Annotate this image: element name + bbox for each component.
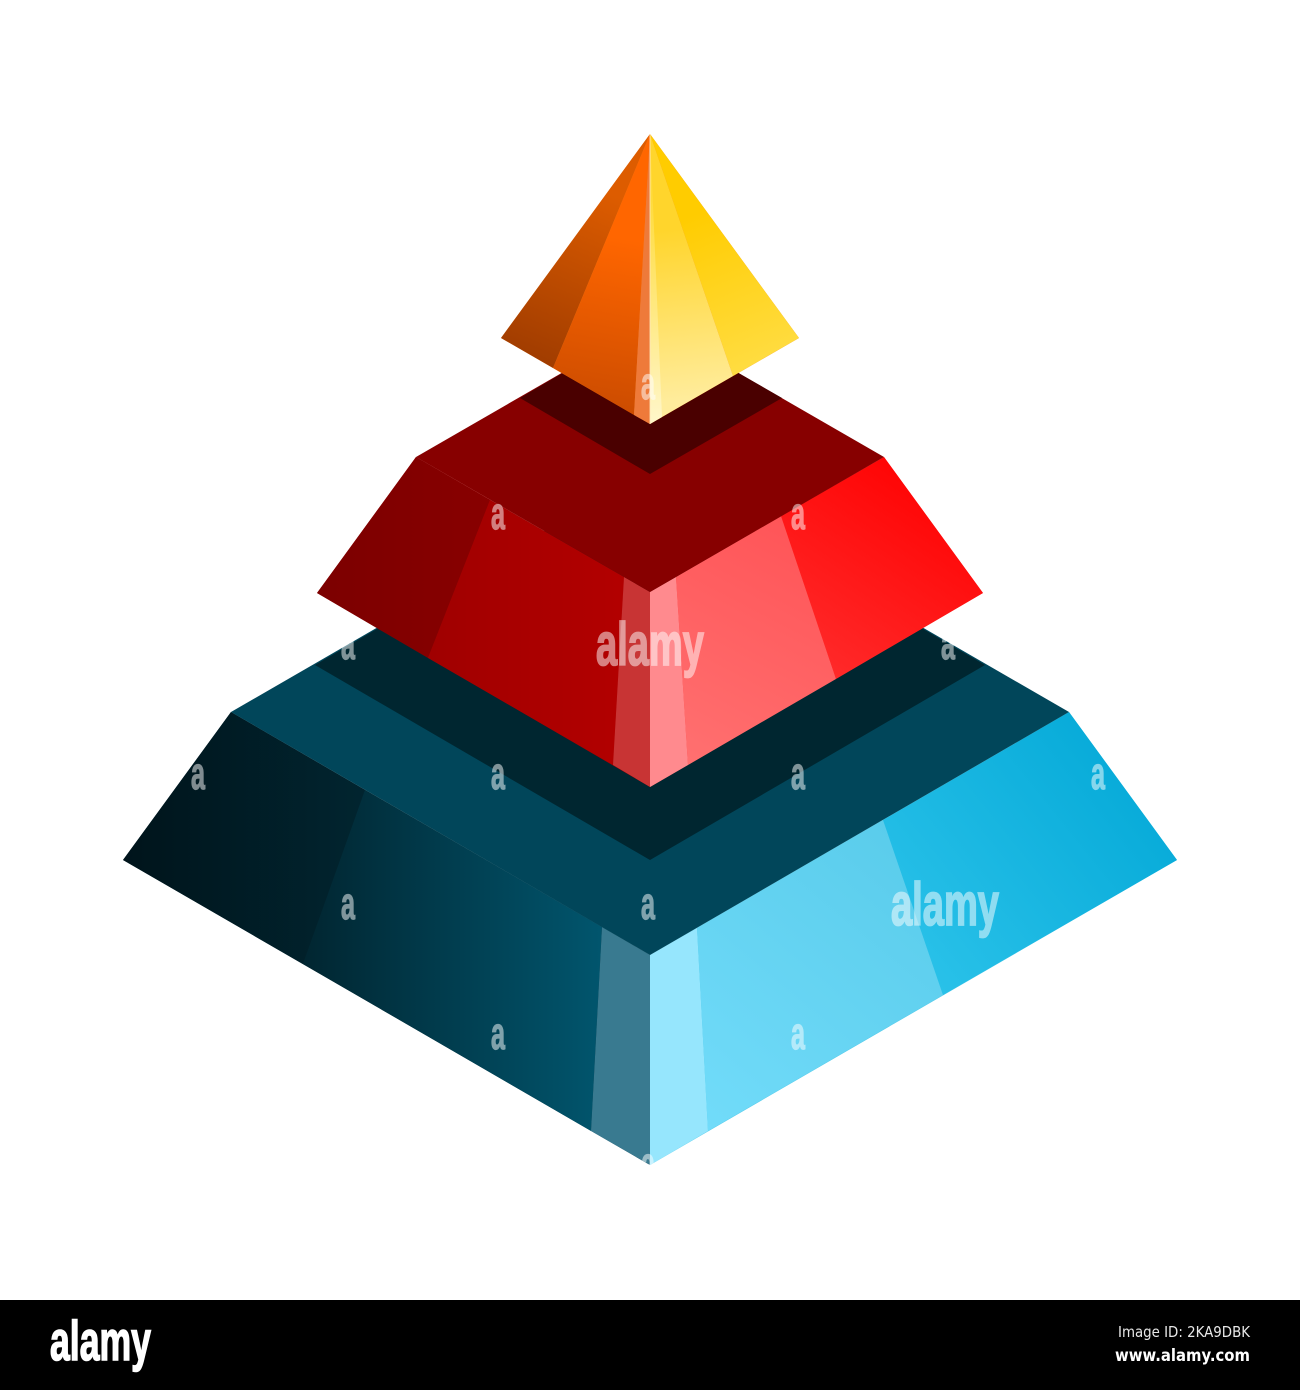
watermark: small letter marks: a [791, 1008, 806, 1059]
red tier cast shadow [520, 322, 782, 474]
red tier left face, dark section [317, 457, 490, 658]
watermark: small letter marks: a [941, 618, 956, 669]
red tier left face, highlight strip [613, 577, 650, 787]
watermark: small letter marks: a [491, 748, 506, 799]
blue tier cast shadow [315, 470, 985, 860]
footer bar [0, 1300, 1300, 1390]
watermark: small letter marks: a [341, 878, 356, 929]
blue tier right face, highlight strip [650, 928, 708, 1165]
apex left face, middle section [553, 134, 650, 415]
watermark: small letter marks: a [641, 878, 656, 929]
footer website: www.alamy.com [1115, 1346, 1250, 1366]
footer logo: alamy: alamy [50, 1309, 151, 1372]
apex underlay [501, 134, 799, 424]
watermark: small letter marks: a [491, 1008, 506, 1059]
watermark: small letter marks: a [341, 618, 356, 669]
watermark: alamy wordmark on blue tier: alamy [891, 871, 999, 938]
apex centre seam [649, 134, 651, 424]
apex right face, outer section [650, 134, 799, 376]
blue tier right face underlay [650, 712, 1177, 1165]
red tier top face [416, 322, 884, 592]
blue tier top face [231, 470, 1069, 955]
blue tier left face, dark section [123, 712, 365, 964]
watermark: small letter marks: a [791, 488, 806, 539]
top tier: orange and yellow pyramid [501, 134, 799, 424]
apex left face, dark section [501, 134, 650, 368]
middle tier: red pyramid section [317, 322, 983, 787]
red tier right face, highlight strip [650, 577, 688, 787]
red tier right face underlay [650, 457, 983, 787]
watermark: small letter marks: a [791, 748, 806, 799]
red tier right face, outer section [781, 457, 983, 679]
watermark: small letter marks [191, 358, 1106, 1189]
watermark: small letter marks: a [641, 1138, 656, 1189]
apex right face, middle section [650, 134, 733, 424]
watermark: small letter marks: a [191, 748, 206, 799]
blue tier right face, light section [697, 820, 943, 1131]
red tier left face, middle section [428, 500, 624, 765]
watermark: small letter marks: a [1091, 748, 1106, 799]
apex right face, highlight strip [650, 134, 662, 424]
watermark: alamy wordmark on red tier: alamy [596, 611, 704, 678]
red tier left face underlay [317, 457, 650, 787]
watermark: repeated alamy marks [191, 358, 1106, 1189]
apex left face, highlight strip [634, 134, 650, 424]
bottom tier: blue pyramid base [123, 470, 1177, 1165]
blue tier left face, highlight strip [591, 927, 650, 1165]
blue tier left face underlay [123, 712, 650, 1165]
blue tier right face, outer section [883, 712, 1177, 995]
red tier right face, light section [676, 516, 836, 765]
blue tier left face, middle section [303, 790, 602, 1131]
watermark: small letter marks: a [641, 358, 656, 409]
watermark: small letter marks: a [491, 488, 506, 539]
footer image id: Image ID: 2KA9DBK [1118, 1323, 1251, 1341]
